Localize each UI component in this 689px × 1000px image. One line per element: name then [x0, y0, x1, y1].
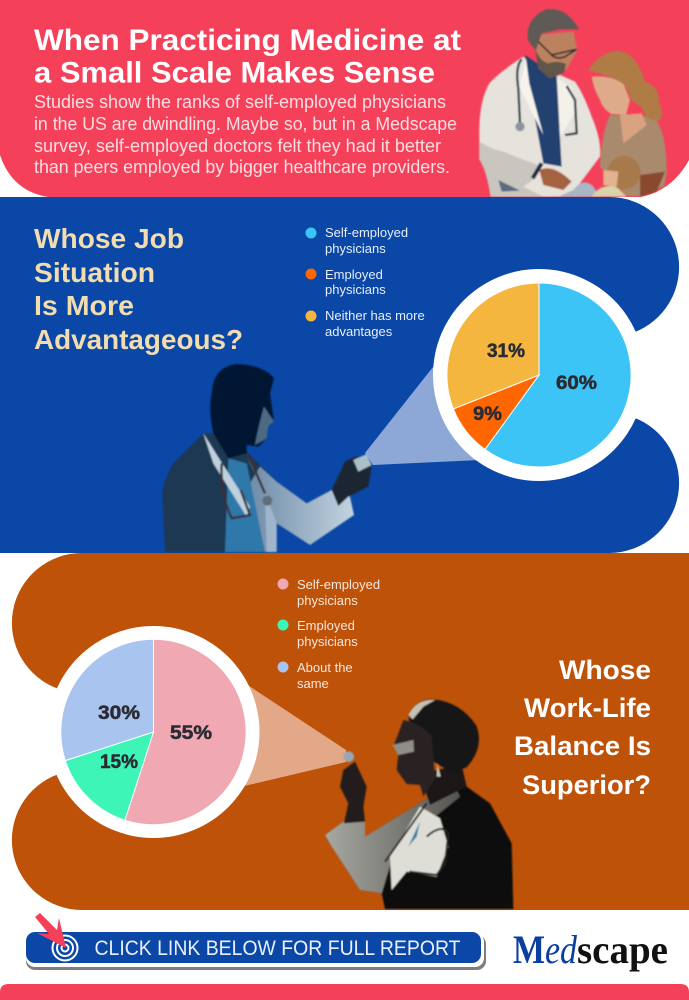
call to action button: CLICK LINK BELOW FOR FULL REPORT [94, 937, 461, 960]
flashlight beam: work-life balance [240, 680, 346, 787]
pie chart: job situation [433, 269, 645, 481]
title: a Small Scale Makes Sense [34, 56, 435, 90]
intro text [34, 91, 457, 177]
panel: work-life balance [12, 553, 689, 910]
title: When Practicing Medicine at [34, 24, 461, 57]
heading: job situation: Situation [34, 257, 155, 288]
logo: Medscape: scape [577, 927, 668, 972]
title [34, 24, 461, 90]
intro text: than peers employed by bigger healthcare providers. [34, 156, 450, 177]
pie chart: job situation: 60% [556, 373, 597, 394]
legend: job situation: advantages [325, 324, 393, 339]
legend: work-life balance: About the [297, 660, 353, 675]
intro text: in the US are dwindling. Maybe so, but in a Medscape [34, 113, 457, 134]
heading: job situation: Advantageous? [34, 324, 243, 355]
pie chart: work-life balance [48, 626, 260, 838]
legend: work-life balance: same [297, 676, 329, 691]
legend: job situation: Neither has more [325, 308, 425, 323]
pie chart: work-life balance: 30% [98, 703, 140, 724]
footer bar [0, 984, 689, 1000]
heading: work-life balance [514, 655, 651, 800]
heading: work-life balance: Balance Is [514, 731, 651, 761]
legend: job situation [306, 225, 425, 339]
legend: work-life balance: Self-employed [297, 577, 380, 592]
heading: work-life balance: Whose [559, 655, 651, 685]
legend: job situation: physicians [325, 282, 386, 297]
illustration: doctor with mother and baby [479, 9, 667, 197]
flashlight beam: job situation [365, 367, 480, 465]
legend: work-life balance: physicians [297, 634, 358, 649]
heading: job situation: Is More [34, 290, 134, 321]
icon: red arrow [35, 913, 66, 948]
icon: target rings [52, 936, 78, 960]
pie chart: work-life balance: 55% [170, 723, 212, 744]
logo: Medscape [513, 927, 668, 972]
pie chart: work-life balance: 15% [100, 752, 138, 773]
pie chart: job situation: 31% [487, 341, 525, 362]
intro text: Studies show the ranks of self-employed physicians [34, 91, 446, 112]
heading: work-life balance: Work-Life [524, 693, 651, 723]
legend: work-life balance: physicians [297, 593, 358, 608]
intro text: survey, self-employed doctors felt they had it better [34, 135, 441, 156]
heading: job situation [34, 223, 243, 355]
legend: job situation: Self-employed [325, 225, 408, 240]
heading: work-life balance: Superior? [522, 770, 651, 800]
pie chart: job situation: 9% [473, 404, 502, 425]
legend: job situation: Employed [325, 267, 383, 282]
illustration: male doctor with flashlight [163, 364, 372, 552]
legend: work-life balance [278, 577, 380, 691]
call to action button [26, 913, 486, 970]
panel: header [0, 0, 689, 197]
legend: job situation: physicians [325, 241, 386, 256]
legend: work-life balance: Employed [297, 618, 355, 633]
logo: Medscape: Med [513, 927, 578, 972]
panel: job situation [0, 197, 679, 553]
heading: job situation: Whose Job [34, 223, 184, 254]
illustration: female doctor with flashlight [325, 699, 513, 909]
